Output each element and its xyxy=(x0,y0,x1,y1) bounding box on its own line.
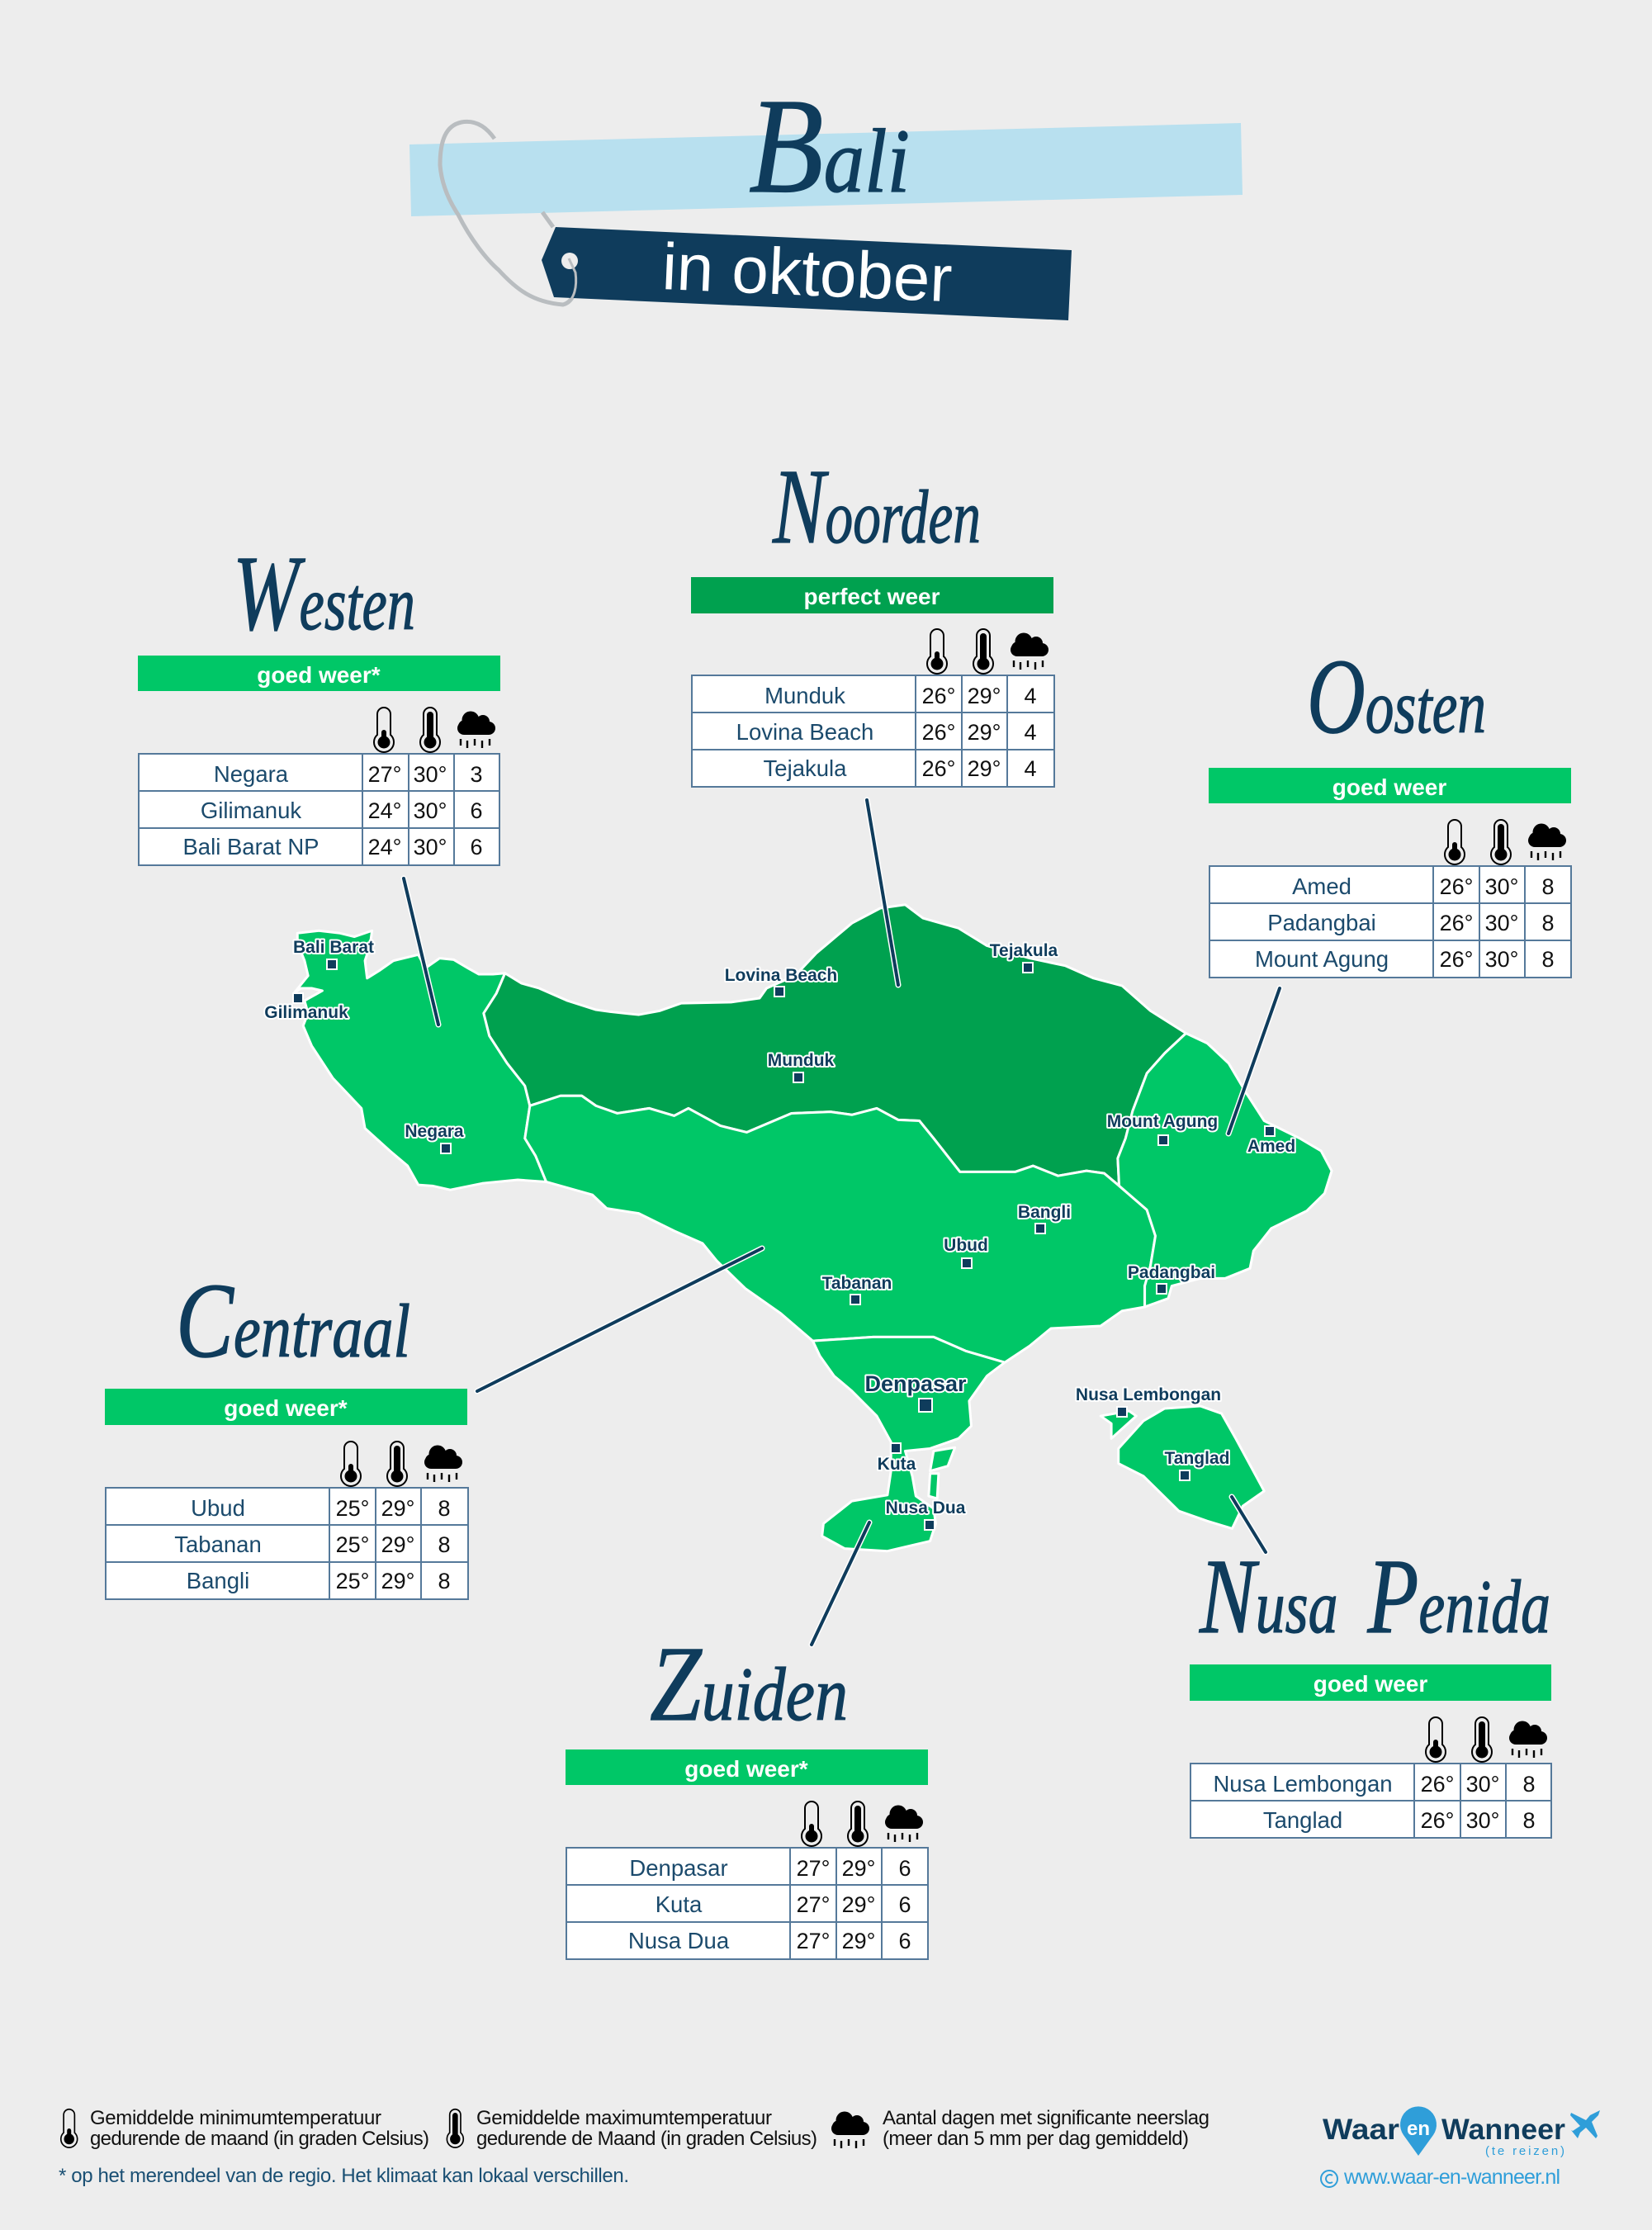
climate table: Kuta xyxy=(656,1891,703,1917)
climate table: Denpasar xyxy=(629,1855,728,1881)
place: Denpasar: Denpasar xyxy=(864,1371,967,1396)
heading: Noorden xyxy=(772,447,981,566)
climate table: Lovina Beach xyxy=(736,719,873,745)
legend: minimum temperature: Gemiddelde minimumtemperatuur xyxy=(90,2107,381,2129)
logo: copyright icon xyxy=(1321,2171,1337,2187)
climate table: 30° xyxy=(414,835,447,859)
logo: Wanneer: Wanneer xyxy=(1441,2114,1565,2146)
weather banner xyxy=(691,577,1053,613)
logo: en: en xyxy=(1407,2118,1430,2140)
footnote: * op het merendeel van de regio. Het klimaat kan lokaal verschillen. xyxy=(59,2165,629,2187)
place: Kuta xyxy=(878,1443,916,1474)
legend: maximum temperature xyxy=(447,2107,817,2150)
climate table: 8 xyxy=(1541,911,1555,935)
climate table: 6 xyxy=(470,798,483,823)
climate table: 29° xyxy=(381,1569,414,1593)
climate table: 8 xyxy=(438,1532,451,1557)
climate table: 30° xyxy=(1485,874,1518,899)
legend xyxy=(59,2107,1209,2187)
title: Bali: Bali xyxy=(749,70,910,221)
climate table: 27° xyxy=(797,1892,830,1917)
legend: minimum temperature: gedurende de maand (in graden Celsius) xyxy=(90,2128,429,2150)
weather banner: goed weer xyxy=(1314,1671,1427,1697)
place: Denpasar xyxy=(864,1371,967,1412)
place: Bangli: Bangli xyxy=(1018,1203,1071,1222)
legend: maximum temperature: Gemiddelde maximumtemperatuur xyxy=(476,2107,772,2129)
logo: Waar: Waar xyxy=(1323,2114,1399,2146)
place: Mount Agung xyxy=(1107,1112,1218,1145)
title band xyxy=(409,123,1243,216)
place: Tejakula: Tejakula xyxy=(990,941,1058,960)
climate table: Padangbai xyxy=(1267,910,1376,935)
map of Bali xyxy=(264,905,1332,1551)
place: Bali Barat xyxy=(293,938,374,969)
climate table: 26° xyxy=(922,720,955,745)
tag string front xyxy=(563,258,576,305)
weather banner: goed weer xyxy=(1332,774,1446,800)
climate table xyxy=(106,1488,468,1599)
tag hole xyxy=(561,253,578,269)
climate table: 29° xyxy=(381,1496,414,1521)
heading: Zuiden xyxy=(650,1625,848,1744)
climate table: 26° xyxy=(1440,911,1473,935)
place: Nusa Lembongan xyxy=(1076,1385,1221,1417)
logo: pin xyxy=(1400,2106,1437,2156)
title block xyxy=(409,70,1243,320)
panel: Oosten xyxy=(1209,637,1571,978)
climate table: 26° xyxy=(1421,1772,1454,1797)
leader line: Nusa Penida xyxy=(1232,1497,1266,1552)
climate table: Ubud xyxy=(191,1495,245,1521)
legend: rain days xyxy=(831,2107,1209,2150)
place: Mount Agung: Mount Agung xyxy=(1107,1112,1218,1131)
place: Nusa Lembongan: Nusa Lembongan xyxy=(1076,1385,1221,1404)
place: Ubud: Ubud xyxy=(944,1236,988,1255)
climate table: 27° xyxy=(797,1929,830,1953)
place: Tanglad: Tanglad xyxy=(1165,1449,1229,1468)
climate table: 30° xyxy=(1466,1772,1499,1797)
heading: Oosten xyxy=(1307,637,1486,756)
climate table: 27° xyxy=(797,1856,830,1881)
climate table: Negara xyxy=(214,761,289,787)
climate table: 30° xyxy=(1485,911,1518,935)
climate table: Bangli xyxy=(187,1568,249,1593)
climate table: 29° xyxy=(381,1532,414,1557)
place: Nusa Dua xyxy=(886,1499,966,1530)
place: Amed: Amed xyxy=(1247,1137,1295,1156)
climate table: 26° xyxy=(1440,874,1473,899)
legend: rain days: (meer dan 5 mm per dag gemiddeld) xyxy=(883,2128,1189,2150)
climate table: 30° xyxy=(1466,1808,1499,1833)
heading: Nusa Penida xyxy=(1199,1537,1550,1656)
climate table: 4 xyxy=(1024,756,1037,781)
climate table: 29° xyxy=(968,684,1001,708)
weather banner xyxy=(1209,768,1571,803)
table icons xyxy=(374,708,495,752)
subtitle: in oktober xyxy=(660,230,954,315)
leader line: Oosten xyxy=(1228,988,1280,1134)
climate table xyxy=(1209,866,1571,978)
place: Gilimanuk xyxy=(264,993,348,1022)
climate table: 30° xyxy=(414,798,447,823)
logo: tagline: (te reizen) xyxy=(1485,2144,1564,2158)
table icons xyxy=(927,629,1048,674)
climate table: 24° xyxy=(368,835,401,859)
leader line: Noorden xyxy=(867,800,898,985)
leader line: Zuiden xyxy=(812,1522,869,1645)
climate table: 4 xyxy=(1024,684,1037,708)
climate table: Munduk xyxy=(764,683,845,708)
climate table: 29° xyxy=(968,720,1001,745)
region: Oosten xyxy=(1118,1033,1332,1307)
climate table: 3 xyxy=(470,762,483,787)
climate table: 6 xyxy=(470,835,483,859)
climate table: 29° xyxy=(842,1856,875,1881)
panel: Zuiden xyxy=(566,1625,928,1959)
leader line: Centraal xyxy=(477,1248,762,1391)
legend: rain days: Aantal dagen met significante neerslag xyxy=(883,2107,1209,2129)
climate table: Nusa Dua xyxy=(628,1928,730,1953)
place: Kuta: Kuta xyxy=(878,1455,916,1474)
heading: Centraal xyxy=(176,1262,410,1380)
table icons xyxy=(1445,820,1566,864)
climate table xyxy=(566,1848,928,1959)
place: Munduk: Munduk xyxy=(768,1051,835,1070)
climate table: 25° xyxy=(336,1496,369,1521)
climate table: 8 xyxy=(1541,874,1555,899)
place: Tejakula xyxy=(990,941,1058,973)
place: Negara xyxy=(405,1122,464,1153)
climate table: Tejakula xyxy=(764,755,847,781)
heading: Westen xyxy=(233,534,415,653)
climate table: Nusa Lembongan xyxy=(1213,1771,1393,1797)
climate table: 6 xyxy=(898,1929,911,1953)
region: Noorden xyxy=(484,905,1186,1186)
climate table: Tabanan xyxy=(174,1532,262,1557)
climate table: 25° xyxy=(336,1569,369,1593)
climate table: 26° xyxy=(1421,1808,1454,1833)
climate table xyxy=(692,675,1054,787)
place: Ubud xyxy=(944,1236,988,1268)
weather banner: goed weer* xyxy=(224,1395,348,1421)
climate table: 8 xyxy=(438,1569,451,1593)
tag string xyxy=(440,121,576,305)
weather banner xyxy=(566,1749,928,1785)
logo xyxy=(1321,2106,1600,2189)
place: Nusa Dua: Nusa Dua xyxy=(886,1499,966,1517)
weather banner: goed weer* xyxy=(257,662,381,688)
panel: Centraal xyxy=(105,1262,468,1599)
place: Munduk xyxy=(768,1051,835,1082)
panel: Noorden xyxy=(691,447,1054,787)
climate table: Tanglad xyxy=(1263,1807,1342,1833)
climate table: 29° xyxy=(842,1892,875,1917)
region: Nusa Penida xyxy=(1101,1406,1264,1528)
climate table: 4 xyxy=(1024,720,1037,745)
climate table xyxy=(139,754,499,865)
climate table: 6 xyxy=(898,1892,911,1917)
table icons xyxy=(1426,1717,1547,1762)
weather banner xyxy=(105,1389,467,1425)
place: Padangbai: Padangbai xyxy=(1128,1263,1215,1282)
place: Bali Barat: Bali Barat xyxy=(293,938,374,957)
panel: Nusa Penida xyxy=(1190,1537,1551,1838)
weather banner: perfect weer xyxy=(804,584,940,609)
climate table: 26° xyxy=(922,756,955,781)
climate table: 8 xyxy=(1522,1772,1536,1797)
climate table: Amed xyxy=(1292,874,1351,899)
logo: plane xyxy=(1570,2110,1600,2138)
place: Lovina Beach xyxy=(725,966,837,997)
logo: url: www.waar-en-wanneer.nl xyxy=(1343,2166,1560,2189)
climate table: 8 xyxy=(1522,1808,1536,1833)
place: Amed xyxy=(1247,1126,1295,1156)
place: Negara: Negara xyxy=(405,1122,464,1141)
place: Tanglad xyxy=(1165,1449,1229,1480)
weather banner xyxy=(1190,1664,1551,1701)
climate table: Mount Agung xyxy=(1255,946,1389,972)
region: Zuiden xyxy=(812,1337,1005,1551)
climate table: 24° xyxy=(368,798,401,823)
table icons xyxy=(802,1802,923,1846)
climate table: Bali Barat NP xyxy=(182,834,320,859)
legend: maximum temperature: gedurende de Maand (in graden Celsius) xyxy=(476,2128,817,2150)
climate table: 26° xyxy=(922,684,955,708)
climate table: 29° xyxy=(842,1929,875,1953)
region: Westen xyxy=(294,930,547,1190)
weather banner: goed weer* xyxy=(684,1756,808,1782)
place: Gilimanuk: Gilimanuk xyxy=(264,1003,348,1022)
place: Tabanan: Tabanan xyxy=(822,1274,892,1293)
climate table: 30° xyxy=(414,762,447,787)
climate table: 29° xyxy=(968,756,1001,781)
climate table: 6 xyxy=(898,1856,911,1881)
place: Padangbai xyxy=(1128,1263,1215,1294)
leader line: Westen xyxy=(404,878,438,1025)
climate table: Gilimanuk xyxy=(201,798,301,823)
climate table: 8 xyxy=(438,1496,451,1521)
legend: minimum temperature xyxy=(61,2107,429,2150)
place: Tabanan xyxy=(822,1274,892,1304)
panel: Westen xyxy=(138,534,500,865)
date tag xyxy=(542,227,1072,320)
climate table: 30° xyxy=(1485,947,1518,972)
climate table: 25° xyxy=(336,1532,369,1557)
climate table: 8 xyxy=(1541,947,1555,972)
table icons xyxy=(341,1442,462,1486)
climate table: 26° xyxy=(1440,947,1473,972)
place: Bangli xyxy=(1018,1203,1071,1233)
region: Centraal xyxy=(525,1096,1155,1362)
climate table: 27° xyxy=(368,762,401,787)
climate table xyxy=(1190,1764,1551,1838)
place: Lovina Beach: Lovina Beach xyxy=(725,966,837,985)
weather banner xyxy=(138,656,500,691)
